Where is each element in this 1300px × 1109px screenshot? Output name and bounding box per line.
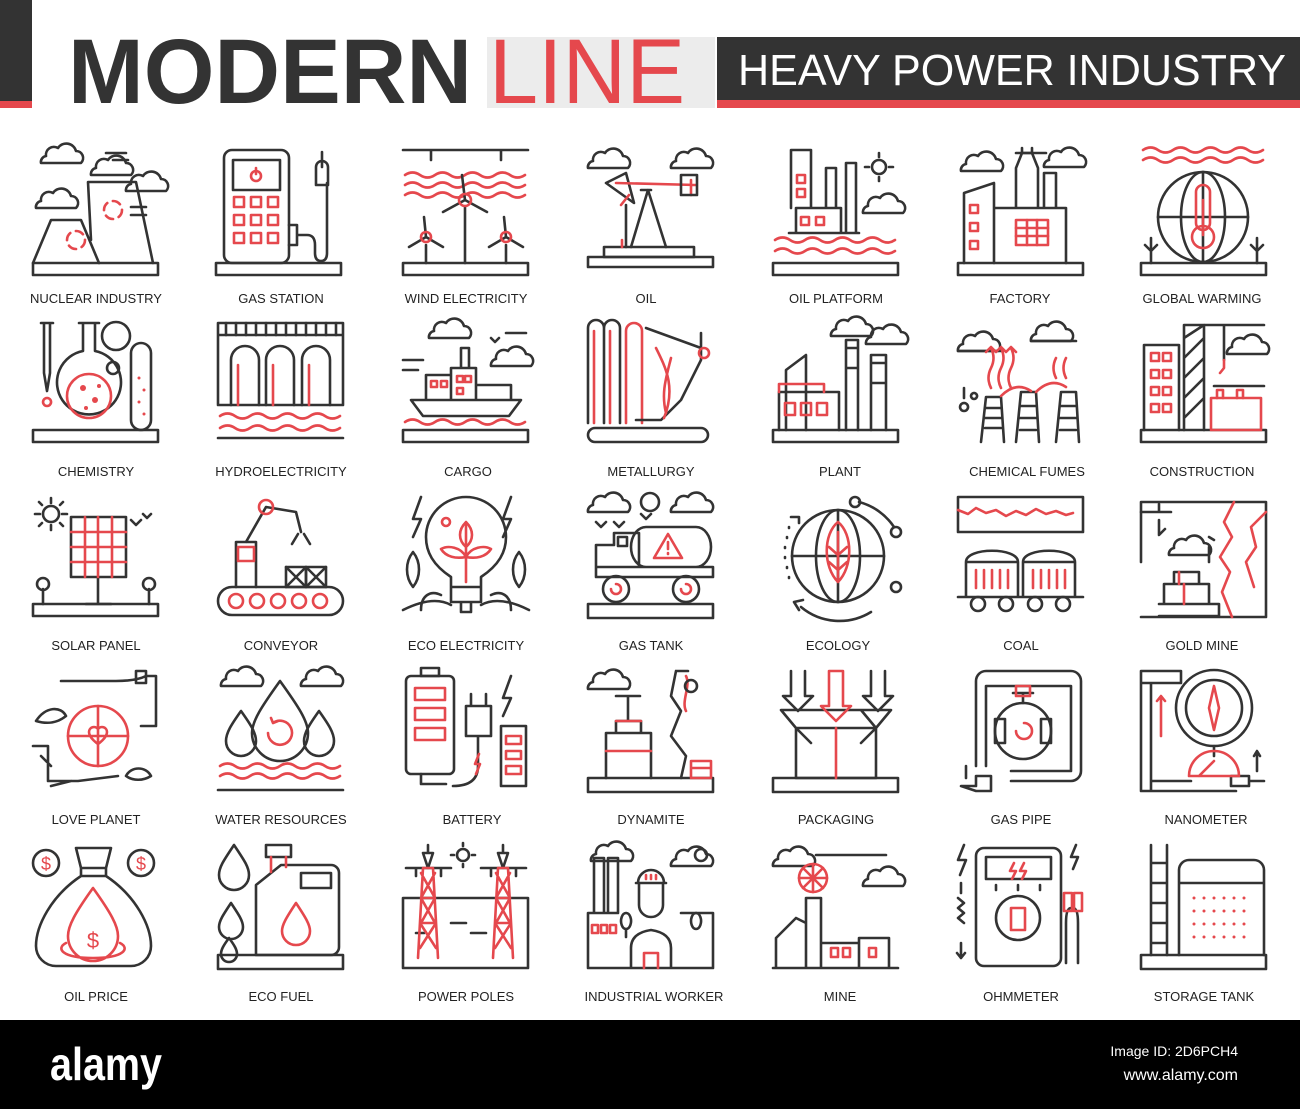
text: FACTORY <box>990 291 1051 306</box>
text: MINE <box>824 989 857 1004</box>
text: HYDROELECTRICITY <box>215 464 347 479</box>
subtitle banner: HEAVY POWER INDUSTRY <box>738 46 1286 95</box>
text: WATER RESOURCES <box>215 812 347 827</box>
icon: plant <box>773 317 908 442</box>
icon: oil price <box>33 848 154 966</box>
icon: nuclear industry <box>33 144 168 275</box>
icon: storage tank <box>1141 845 1266 969</box>
text: INDUSTRIAL WORKER <box>585 989 723 1004</box>
icon: water resources <box>218 667 343 790</box>
text: OIL <box>636 291 656 306</box>
text: SOLAR PANEL <box>51 638 141 653</box>
text: NANOMETER <box>1164 812 1248 827</box>
text: WIND ELECTRICITY <box>405 291 528 306</box>
text: CONVEYOR <box>244 638 318 653</box>
header: left bar <box>0 0 32 108</box>
icon: nanometer <box>1141 670 1264 791</box>
icon: conveyor <box>218 500 343 615</box>
icon: gold mine <box>1141 502 1266 617</box>
label: NUCLEAR INDUSTRY <box>30 291 162 306</box>
icon: ecology <box>785 497 901 621</box>
footer image id: Image ID: 2D6PCH4 <box>1110 1043 1238 1059</box>
text: GAS STATION <box>238 291 324 306</box>
icon: mine <box>773 847 905 968</box>
text: CHEMISTRY <box>58 464 134 479</box>
text: OIL PRICE <box>64 989 128 1004</box>
icon: solar panel <box>33 498 158 616</box>
icon: packaging <box>773 671 898 792</box>
text: LOVE PLANET <box>52 812 140 827</box>
text: ECO ELECTRICITY <box>408 638 524 653</box>
icon: love planet <box>33 671 156 786</box>
icon: hydroelectricity <box>218 323 343 438</box>
text: CONSTRUCTION <box>1150 464 1254 479</box>
icon: oil platform <box>773 150 905 275</box>
icon: wind electricity <box>403 150 528 275</box>
text: PACKAGING <box>798 812 874 827</box>
footer band <box>0 1020 1300 1109</box>
icon: factory <box>958 148 1086 275</box>
text: GAS PIPE <box>991 812 1052 827</box>
footer url: www.alamy.com <box>1123 1067 1238 1084</box>
icon: cargo <box>403 319 533 442</box>
text: ECOLOGY <box>806 638 870 653</box>
text: OIL PLATFORM <box>789 291 883 306</box>
text: BATTERY <box>443 812 502 827</box>
text: GAS TANK <box>619 638 684 653</box>
icon: gas station <box>216 150 341 275</box>
icon: construction <box>1141 325 1269 442</box>
text: CHEMICAL FUMES <box>969 464 1085 479</box>
text: METALLURGY <box>607 464 695 479</box>
icon: power poles <box>403 843 528 968</box>
icon: ohmmeter <box>957 845 1082 966</box>
icon: chemical fumes <box>958 322 1079 442</box>
icon: global warming <box>1141 148 1266 275</box>
text: GOLD MINE <box>1166 638 1239 653</box>
footer logo: alamy <box>50 1038 162 1090</box>
icon: metallurgy <box>588 320 709 442</box>
text: GLOBAL WARMING <box>1143 291 1261 306</box>
icon: battery <box>406 668 526 786</box>
text: PLANT <box>819 464 861 479</box>
text: CARGO <box>444 464 492 479</box>
icon: chemistry <box>33 322 158 442</box>
text: OHMMETER <box>983 989 1059 1004</box>
icon: eco fuel <box>218 845 343 969</box>
text: ECO FUEL <box>248 989 314 1004</box>
icon: gas tank <box>588 493 713 618</box>
icon: oil price: $ <box>41 854 51 874</box>
icon: industrial worker <box>588 842 713 968</box>
icon: eco electricity <box>403 497 529 612</box>
icon: oil price: $ <box>87 928 99 953</box>
icon: gas pipe <box>961 671 1081 791</box>
text: POWER POLES <box>418 989 514 1004</box>
title: MODERN: MODERN <box>68 21 472 123</box>
icon: oil price: $ <box>136 854 146 874</box>
title: LINE: LINE <box>489 21 685 123</box>
icon: oil <box>588 149 713 267</box>
subtitle banner <box>717 37 1300 108</box>
icon: dynamite <box>588 670 713 792</box>
text: STORAGE TANK <box>1154 989 1255 1004</box>
text: DYNAMITE <box>617 812 685 827</box>
text: COAL <box>1003 638 1039 653</box>
icon: coal <box>958 497 1083 611</box>
